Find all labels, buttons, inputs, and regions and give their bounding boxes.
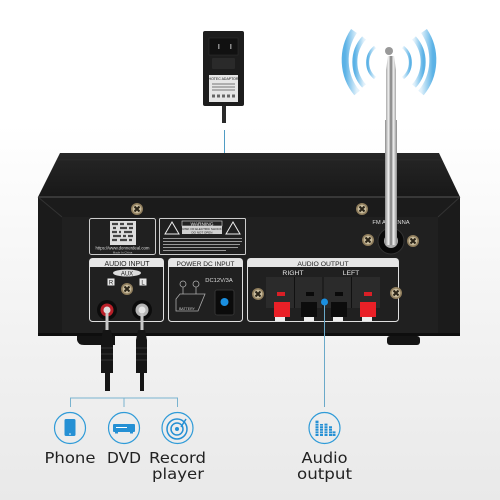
panel: power DC input <box>168 258 242 322</box>
warning label <box>160 218 246 254</box>
label: record player: Record <box>149 449 206 467</box>
source: DVD <box>107 412 141 467</box>
RCA jack and cable: red <box>97 300 117 391</box>
label: record player: player <box>152 465 205 483</box>
warning label: WARNING <box>190 222 214 228</box>
connector bracket: audio input sources <box>70 398 178 407</box>
source: record player <box>149 412 206 483</box>
telescopic antenna <box>385 47 397 245</box>
icon: phone <box>54 412 86 444</box>
power adapter: HOTEC ADAPTOR <box>209 77 239 81</box>
panel: audio input <box>90 258 164 322</box>
top screws <box>131 203 368 215</box>
FM antenna mount: FM ANTENNA <box>372 220 410 226</box>
label: audio output: Audio <box>302 449 348 467</box>
panel: audio input: AUX <box>121 272 133 278</box>
icon: DVD player <box>108 412 140 444</box>
QR label: Made In China <box>113 250 133 254</box>
connector line: audio output to icon <box>321 298 328 407</box>
antenna signal waves <box>345 31 433 93</box>
warning label: DO NOT OPEN <box>192 230 212 234</box>
panel: audio input: L <box>141 280 145 286</box>
RCA jack and cable: white <box>132 300 152 391</box>
panel: power DC input: POWER DC INPUT <box>177 261 234 268</box>
panel: audio output <box>248 258 402 322</box>
panel: audio output: LEFT <box>343 270 359 277</box>
panel: audio output: RIGHT <box>282 270 304 277</box>
panel: audio output: AUDIO OUTPUT <box>297 261 349 268</box>
label: phone: Phone <box>44 449 96 467</box>
QR label <box>90 218 156 254</box>
icon: equalizer <box>309 412 340 444</box>
rubber foot left <box>77 336 115 345</box>
panel: power DC input: BATTERY <box>179 307 196 311</box>
label: audio output: output <box>297 465 352 483</box>
rubber foot right <box>387 336 420 345</box>
power adapter <box>203 31 244 123</box>
panel: power DC input: DC12V/3A <box>205 278 233 284</box>
source: phone <box>44 412 96 467</box>
FM antenna mount <box>362 220 419 254</box>
output: audio <box>297 412 352 483</box>
label: DVD: DVD <box>107 449 141 467</box>
icon: record player <box>162 412 193 444</box>
panel: audio input: AUDIO INPUT <box>104 261 150 268</box>
amplifier body <box>38 153 460 345</box>
panel: audio input: R <box>109 280 114 286</box>
QR label: https://www.donnerdeal.com <box>96 246 150 250</box>
power input dot <box>220 298 228 306</box>
warning label: RISK OF ELECTRIC SHOCK <box>182 227 222 231</box>
connector line: adapter to power input <box>224 130 226 302</box>
